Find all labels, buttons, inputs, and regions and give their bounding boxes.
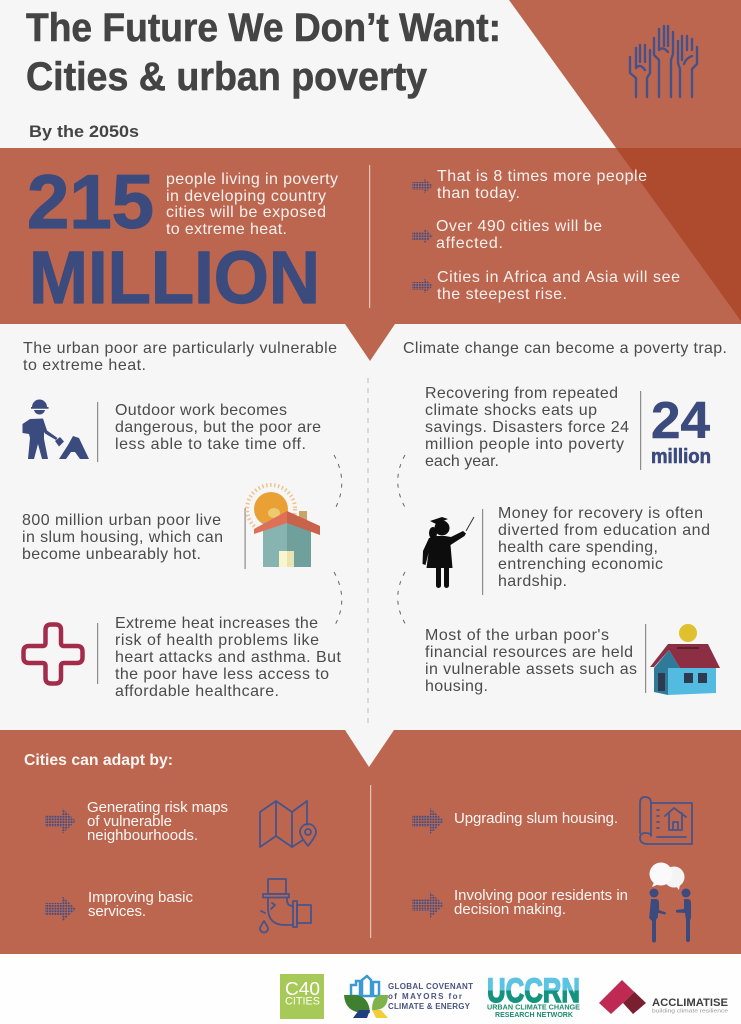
icon: girl pointing at board (422, 517, 474, 588)
icon: map with pin (260, 801, 316, 847)
text: climate shocks: each year. (425, 453, 499, 470)
logo: C40 cities: C40 (285, 979, 320, 999)
bullet text 2: Over 490 cities will be (436, 218, 602, 235)
logo: global covenant of mayors: of MAYORS for (388, 992, 462, 1001)
logo: C40 cities (280, 974, 324, 1019)
left heading: to extreme heat. (23, 357, 146, 374)
icon: house blueprint (640, 797, 692, 844)
text: outdoor work (115, 402, 321, 453)
text: money for recovery: health care spending, (498, 539, 658, 556)
icon: worker with shovel (22, 400, 89, 459)
text: slum housing: in slum housing, which can (22, 529, 223, 546)
text: residents: Involving poor residents in (454, 887, 628, 904)
logo: UCCRN: URBAN CLIMATE CHANGE (487, 1004, 580, 1012)
by the 2050s: By the 2050s (29, 123, 139, 141)
statistic description: cities will be exposed (166, 204, 326, 221)
bullet text 2 (436, 218, 602, 252)
text: outdoor work: less able to take time off. (115, 436, 306, 453)
down pointer (345, 324, 395, 361)
bullet text 2: affected. (436, 235, 503, 252)
bullet text 1: That is 8 times more people (437, 168, 647, 185)
statistic description (166, 171, 338, 238)
text: risk maps: neighbourhoods. (87, 827, 198, 844)
text: financial resources (425, 627, 637, 695)
bullet text 1 (437, 168, 647, 202)
text: outdoor work: dangerous, but the poor are (115, 419, 321, 436)
footer (0, 954, 741, 1024)
arrow: residents (412, 892, 444, 918)
text: basic services: Improving basic (88, 889, 194, 906)
vertical rule (97, 402, 98, 462)
panel: cities can adapt (0, 730, 741, 954)
logo: global covenant of mayors (344, 976, 473, 1018)
logo: Acclimatise: building climate resilience (652, 1008, 728, 1014)
statistic description: in developing country (166, 188, 326, 205)
statistic description: people living in poverty (166, 171, 338, 188)
statistic: 215 million: MILLION (29, 236, 320, 319)
text: money for recovery: Money for recovery is often (498, 505, 703, 522)
statistic: 24 million: 24 (651, 392, 710, 450)
logo: UCCRN: UCCRN (487, 972, 580, 1010)
text: health: heart attacks and asthma. But (115, 649, 342, 666)
text: financial resources: Most of the urban poor's (425, 627, 609, 644)
title: Cities & urban poverty (26, 55, 428, 99)
text: risk maps: of vulnerable (87, 813, 172, 830)
logo: C40 cities: CITIES (285, 996, 320, 1008)
text: upgrading slum housing: Upgrading slum housing. (454, 810, 618, 827)
left heading: The urban poor are particularly vulnerable (23, 340, 337, 357)
statistic: 24 million: million (651, 446, 711, 468)
text: financial resources: housing. (425, 678, 488, 695)
logo: global covenant of mayors: CLIMATE & ENERGY (388, 1002, 471, 1011)
text: money for recovery: entrenching economic (498, 556, 663, 573)
text: climate shocks: climate shocks eats up (425, 402, 597, 419)
text: residents: decision making. (454, 901, 566, 918)
logo: Acclimatise (599, 980, 728, 1014)
arrow bullet 3 (412, 278, 433, 294)
arrow: risk maps (45, 808, 76, 834)
text: climate shocks: Recovering from repeated (425, 385, 618, 402)
logo: Acclimatise: ACCLIMATISE (652, 997, 728, 1009)
text: risk maps: Generating risk maps (87, 799, 228, 816)
logo: UCCRN (487, 972, 580, 1019)
icon: raised hands (630, 26, 697, 97)
text: money for recovery: hardship. (498, 573, 567, 590)
text: outdoor work: Outdoor work becomes (115, 402, 287, 419)
text: health: the poor have less access to (115, 666, 329, 683)
icon: piggy bank house (650, 624, 720, 695)
text: money for recovery (498, 505, 710, 590)
title: The Future We Don’t Want: (26, 6, 501, 50)
icon: medical cross (24, 624, 82, 684)
statistic: 215 million (27, 160, 320, 319)
text: financial resources: financial resources are held (425, 644, 633, 661)
text: slum housing: 800 million urban poor live (22, 512, 221, 529)
logo: global covenant of mayors: GLOBAL COVENANT (388, 982, 473, 991)
arrow bullet 1 (412, 178, 433, 194)
text: slum housing (22, 512, 223, 563)
text: risk maps (87, 799, 228, 844)
bullet text 3: Cities in Africa and Asia will see (437, 269, 680, 286)
bullet text 1: than today. (437, 185, 520, 202)
text: residents (454, 887, 628, 918)
text: basic services: services. (88, 903, 146, 920)
text: climate shocks (425, 385, 629, 470)
right heading: Climate change can become a poverty trap. (403, 340, 727, 357)
text: health: affordable healthcare. (115, 683, 279, 700)
statistic description: to extreme heat. (166, 221, 287, 238)
statistic: 215 million: 215 (27, 160, 154, 245)
arrow: basic services (45, 896, 76, 922)
panel: headline statistic band (0, 148, 741, 324)
arrow: slum housing (412, 808, 444, 834)
bullet text 3 (437, 269, 680, 303)
text: health (115, 615, 342, 700)
text: climate shocks: savings. Disasters force 24 (425, 419, 629, 436)
text: slum housing: become unbearably hot. (22, 546, 201, 563)
heading: cities can adapt by: Cities can adapt by: (24, 752, 173, 769)
arrow bullet 2 (412, 228, 433, 244)
text: financial resources: in vulnerable assets such as (425, 661, 637, 678)
text: health: risk of health problems like (115, 632, 319, 649)
icon: house in sun (247, 485, 320, 567)
left heading (23, 340, 337, 374)
text: health: Extreme heat increases the (115, 615, 318, 632)
icon: leaking pipe (260, 879, 311, 932)
text: climate shocks: million people into poverty (425, 436, 624, 453)
title (26, 6, 501, 99)
top right triangle (509, 0, 741, 321)
text: basic services (88, 889, 194, 920)
text: money for recovery: diverted from education and (498, 522, 710, 539)
logo: UCCRN: RESEARCH NETWORK (495, 1012, 573, 1019)
bullet text 3: the steepest rise. (437, 286, 567, 303)
icon: two people talking (649, 862, 691, 942)
